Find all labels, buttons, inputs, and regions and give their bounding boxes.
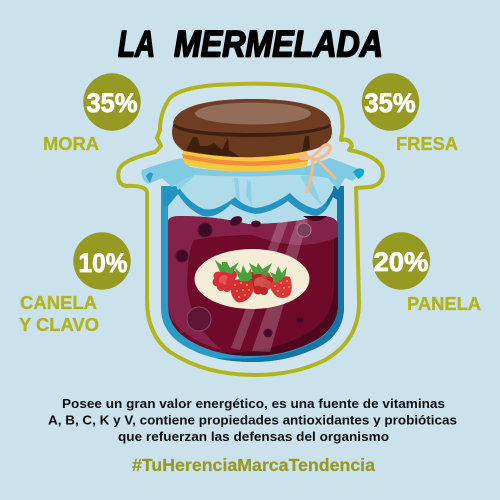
badge: canela 10%: 10% bbox=[78, 248, 128, 278]
label: fresa: FRESA bbox=[396, 133, 458, 154]
badge: fresa 35%: 35% bbox=[364, 88, 416, 118]
badge: canela 10% bbox=[73, 232, 131, 290]
icon: raspberry dark bbox=[247, 270, 274, 295]
cloth body bbox=[172, 172, 335, 210]
jar outline bbox=[118, 84, 383, 375]
bow bbox=[299, 145, 335, 192]
description text: A, B, C, K y V, contiene propiedades antioxidantes y probióticas bbox=[48, 412, 457, 428]
jam bbox=[168, 215, 338, 356]
description text: que refuerzan las defensas del organismo bbox=[118, 429, 389, 444]
description text: Posee un gran valor energético, es una fuente de vitaminas bbox=[62, 396, 445, 411]
jam bubbles bbox=[176, 215, 311, 337]
badge: mora 35%: 35% bbox=[86, 88, 138, 118]
badge: panela 20% bbox=[373, 232, 430, 290]
label: canela y clavo: Y CLAVO bbox=[19, 314, 99, 335]
label: canela y clavo bbox=[19, 292, 99, 335]
title: MERMELADA bbox=[174, 24, 383, 64]
hashtag: #TuHerenciaMarcaTendencia bbox=[132, 455, 375, 475]
label with fruit bbox=[194, 249, 310, 309]
cloth cover bbox=[142, 158, 364, 216]
jar glass bbox=[161, 186, 344, 362]
label: mora: MORA bbox=[43, 133, 99, 154]
cloth folds bbox=[172, 176, 322, 206]
lid bbox=[172, 99, 332, 157]
cloth tip bbox=[353, 168, 364, 179]
label: canela y clavo: CANELA bbox=[20, 292, 97, 313]
icon: leaves bbox=[215, 260, 287, 283]
badge: fresa 35% bbox=[362, 73, 419, 131]
title: LA bbox=[118, 24, 155, 64]
icon: strawberry left bbox=[231, 279, 254, 302]
cloth rim bbox=[142, 158, 362, 190]
ribbon bbox=[182, 148, 308, 172]
icon: raspberry bbox=[212, 268, 237, 292]
reflection bars bbox=[231, 220, 308, 352]
badge: panela 20%: 20% bbox=[374, 247, 428, 277]
icon: strawberry right bbox=[270, 276, 292, 298]
description text bbox=[48, 396, 457, 444]
label: panela: PANELA bbox=[407, 293, 481, 314]
badge: mora 35% bbox=[83, 73, 141, 131]
blue wave bbox=[163, 186, 342, 216]
jam highlight bbox=[168, 216, 338, 350]
